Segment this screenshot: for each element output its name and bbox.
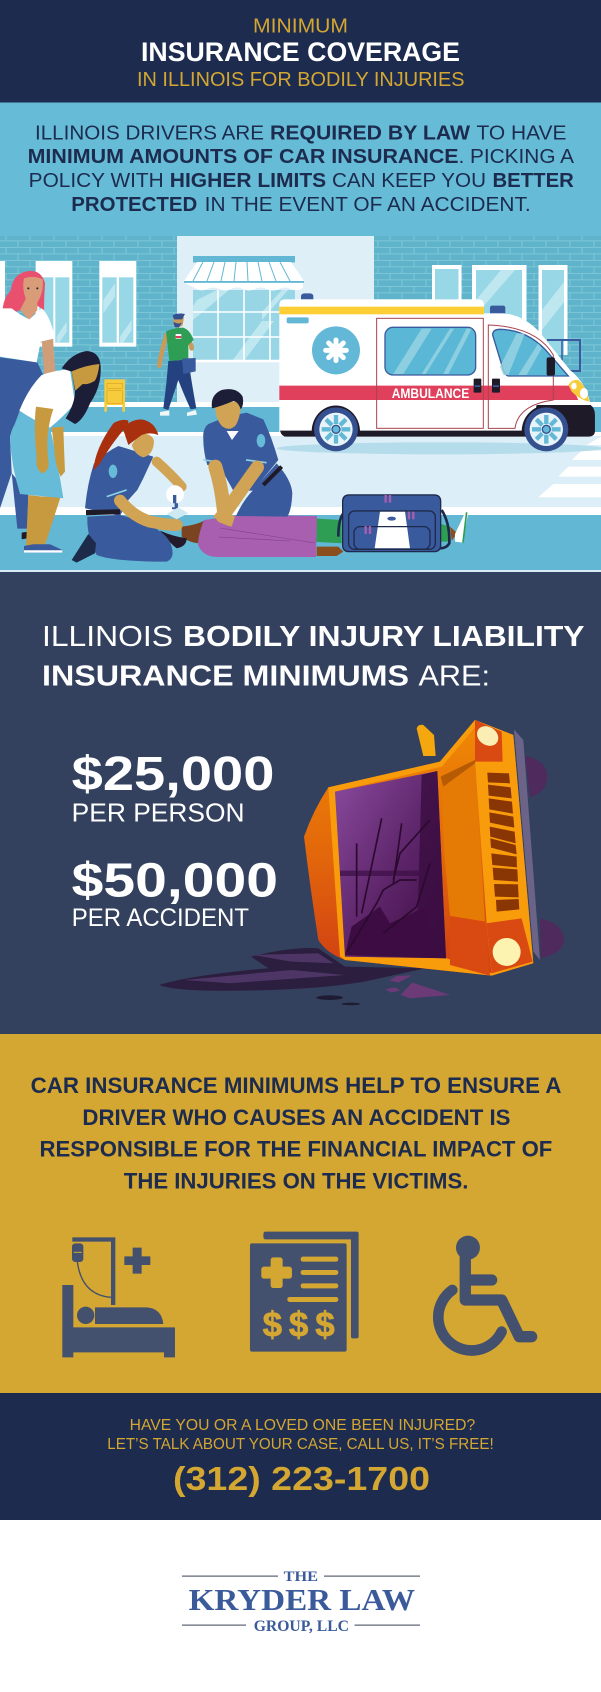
stat: per accident: PER ACCIDENT: [72, 904, 249, 932]
heading: liability minimums: [42, 621, 584, 693]
headlights: [473, 722, 502, 750]
person: medic with red hair: [72, 419, 182, 563]
stat: per person: $25,000: [72, 748, 274, 801]
ambulance: [277, 293, 601, 454]
stat: per person: [72, 748, 274, 828]
headlight: [568, 380, 589, 402]
logo: the kryder law group: GROUP, LLC: [254, 1618, 349, 1635]
panel: why minimums matter: [0, 1034, 601, 1393]
person: medic doing CPR: [203, 389, 292, 527]
head: [160, 521, 204, 548]
heading: in illinois for bodily injuries: IN ILLINOIS FOR BODILY INJURIES: [137, 68, 464, 91]
oxygen mask: [166, 485, 188, 519]
text block: explanation: [31, 1073, 562, 1194]
door outlines: [377, 318, 553, 428]
person: woman with pink hair: [0, 271, 55, 539]
person: woman with dark hair: [10, 351, 101, 553]
ground shadow: [277, 442, 601, 454]
heading: liability minimums: INSURANCE MINIMUMS: [42, 661, 409, 693]
windows: left wall: [0, 261, 136, 347]
text block: intro: TO HAVE: [476, 122, 566, 144]
heading: minimum: MINIMUM: [253, 14, 348, 38]
text block: invitation: [107, 1417, 494, 1453]
icon: wheelchair: [438, 1236, 532, 1350]
icon: medical bill: $: [263, 1306, 282, 1345]
text block: explanation: DRIVER WHO CAUSES AN ACCIDENT IS: [82, 1105, 511, 1130]
torso: [198, 515, 317, 557]
grille: [487, 773, 519, 912]
text block: intro: HIGHER LIMITS: [170, 169, 326, 192]
text block: intro: REQUIRED BY LAW: [270, 122, 471, 144]
text block: intro: CAN KEEP YOU: [332, 169, 486, 192]
front face: [475, 720, 533, 976]
text block: explanation: CAR INSURANCE MINIMUMS HELP TO ENSURE A: [31, 1073, 562, 1098]
text block: intro: BETTER: [492, 169, 574, 192]
icon: medical bill: $: [289, 1306, 308, 1345]
tires: [525, 756, 564, 958]
text block: intro: [28, 122, 574, 216]
logo: the kryder law group: [182, 1569, 420, 1635]
windshield: [335, 771, 446, 958]
text block: intro: POLICY WITH: [29, 169, 164, 192]
cracks: [347, 818, 430, 952]
heading: liability minimums: ILLINOIS: [42, 621, 173, 653]
icon: medical bill: [250, 1232, 359, 1352]
person: patient: [160, 512, 468, 557]
illustration: overturned car: [304, 720, 564, 976]
text block: intro: .: [459, 145, 464, 168]
text block: invitation: LET’S TALK ABOUT YOUR CASE, CALL US, IT’S FREE!: [107, 1436, 494, 1453]
bumper: [514, 729, 540, 960]
medical bag: [338, 495, 449, 552]
heading: liability minimums: BODILY INJURY LIABILITY: [183, 621, 584, 653]
wheel: rear: [314, 407, 358, 451]
text block: intro: PICKING A: [470, 145, 574, 168]
text block: invitation: HAVE YOU OR A LOVED ONE BEEN INJURED?: [130, 1417, 475, 1434]
side mirror: [417, 725, 436, 756]
yellow sign: [104, 379, 125, 412]
illustration: shadow and debris: [159, 948, 450, 1005]
heading: insurance coverage: INSURANCE COVERAGE: [141, 37, 460, 67]
wheel: front: [524, 407, 568, 451]
illustration: ambulance scene: [0, 236, 601, 572]
window: rear: [385, 327, 476, 375]
hood: [441, 760, 485, 922]
phone number: (312) 223-1700: [173, 1460, 430, 1497]
panel: intro band: [0, 102, 601, 236]
logo: the kryder law group: THE: [284, 1569, 318, 1585]
wheel arches: [312, 405, 360, 432]
text block: intro: ILLINOIS DRIVERS ARE: [35, 122, 264, 144]
storefront: [184, 256, 304, 361]
text block: intro: MINIMUM AMOUNTS OF CAR INSURANCE: [28, 145, 459, 168]
logo: the kryder law group: KRYDER LAW: [189, 1582, 415, 1617]
text block: explanation: RESPONSIBLE FOR THE FINANCIAL IMPACT OF: [40, 1137, 552, 1162]
icon: hospital bed: [62, 1237, 175, 1357]
text block: intro: IN THE EVENT OF AN ACCIDENT.: [205, 193, 531, 216]
label: ambulance: AMBULANCE: [392, 385, 469, 401]
emblem: [312, 326, 360, 374]
windows: right wall: [432, 265, 580, 371]
window: cab: [493, 329, 568, 376]
background: street and buildings: [0, 236, 601, 572]
panel: call to action: [0, 1393, 601, 1520]
text block: intro: PROTECTED: [71, 193, 197, 216]
person: walking man: [159, 314, 197, 416]
panel: header: [0, 0, 601, 102]
legs: [310, 512, 468, 556]
icon: medical bill: $: [315, 1306, 335, 1345]
body: [304, 720, 533, 976]
text block: explanation: THE INJURIES ON THE VICTIMS.: [124, 1169, 468, 1194]
stat: per accident: $50,000: [72, 855, 278, 908]
crosswalk: [538, 437, 601, 497]
stat: per person: PER PERSON: [72, 798, 244, 828]
heading: liability minimums: ARE:: [418, 661, 490, 693]
stat: per accident: [72, 855, 278, 932]
panel: liability minimums: [0, 572, 601, 1034]
